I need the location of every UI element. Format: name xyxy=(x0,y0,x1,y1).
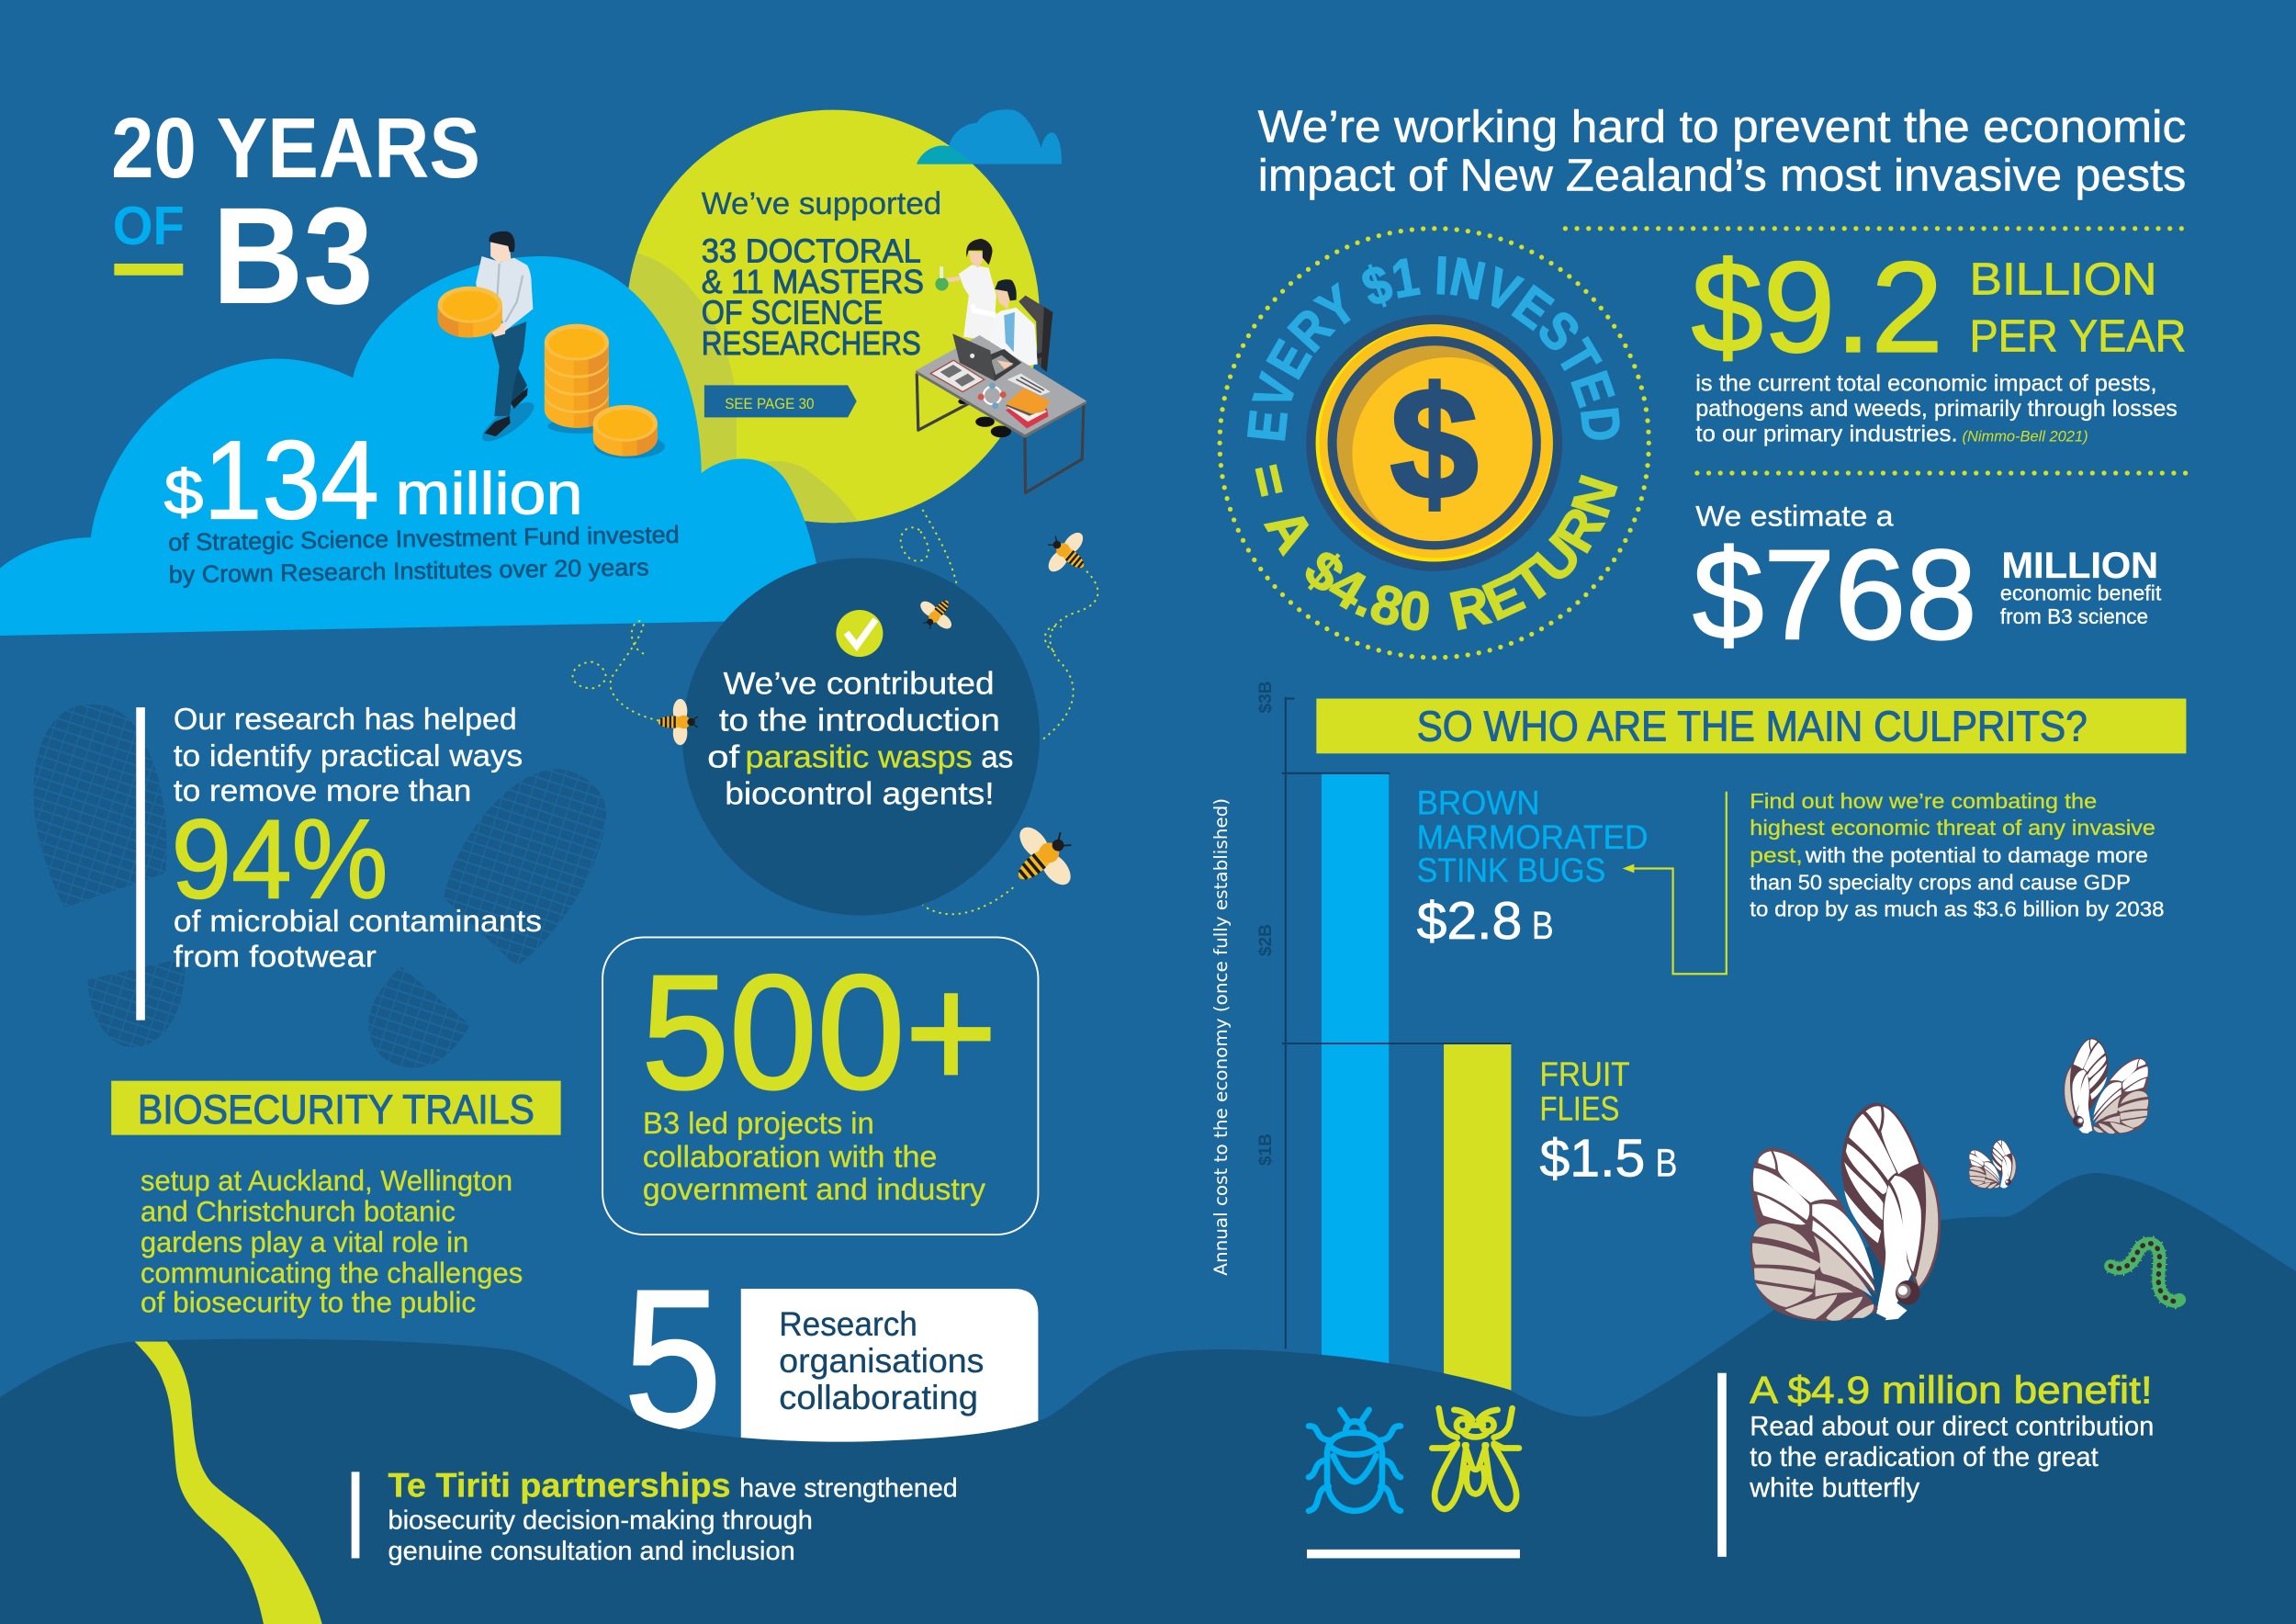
stat: $768 million: We estimate a xyxy=(1695,500,1894,532)
badge: every $1 invested xyxy=(1218,226,1651,660)
researchers text: RESEARCHERS xyxy=(702,325,921,362)
stat: $768 million: $768 xyxy=(1693,524,1976,666)
icon: fruit fly xyxy=(1432,1408,1519,1509)
fruit flies label: FLIES xyxy=(1539,1090,1619,1128)
stat: $768 million: from B3 science xyxy=(2000,604,2148,628)
Te Tiriti partnerships xyxy=(352,1466,958,1566)
footwear stat: to remove more than xyxy=(174,774,471,808)
dark circle panel: parasitic wasps xyxy=(682,558,1040,915)
dotted divider xyxy=(1565,229,2186,473)
research organisations text: organisations xyxy=(779,1341,984,1380)
icon: stink bug xyxy=(1309,1410,1401,1511)
badge: every $1 invested: = A $4.80 RETURN xyxy=(1255,464,1618,630)
footwear stat: 94% xyxy=(172,796,388,922)
stat: $768 million: MILLION xyxy=(2002,546,2158,586)
stink bugs label: BROWN xyxy=(1417,784,1539,821)
stat: $768 million: economic benefit xyxy=(2000,581,2162,605)
footwear stat: of microbial contaminants xyxy=(174,905,542,939)
right heading xyxy=(1258,102,2186,200)
badge: every $1 invested: $ xyxy=(1390,355,1479,532)
stat: $9.2 billion: (Nimmo-Bell 2021) xyxy=(1962,428,2088,445)
footwear stat: from footwear xyxy=(174,940,377,974)
researchers text xyxy=(702,186,941,362)
biosecurity trails text: setup at Auckland, Wellington xyxy=(141,1165,512,1197)
see page tag xyxy=(704,385,857,417)
right heading: We’re working hard to prevent the economic xyxy=(1258,102,2186,152)
base line under icons xyxy=(1307,1550,1520,1558)
small butterfly upper xyxy=(2064,1038,2149,1133)
funding figure: 134 xyxy=(204,417,379,542)
biosecurity trails text: gardens play a vital role in xyxy=(141,1226,468,1258)
stink bug text: highest economic threat of any invasive xyxy=(1750,816,2155,840)
research organisations text: collaborating xyxy=(779,1378,978,1416)
stink bug text: Find out how we’re combating the xyxy=(1750,789,2097,813)
fruit flies label: FRUIT xyxy=(1539,1055,1630,1093)
biosecurity trails text: of biosecurity to the public xyxy=(141,1287,476,1319)
funding figure xyxy=(164,417,680,589)
butterfly benefit text: A $4.9 million benefit! xyxy=(1750,1368,2153,1411)
butterfly benefit text xyxy=(1717,1368,2154,1557)
stat: $9.2 billion: BILLION xyxy=(1969,254,2157,304)
stat: $9.2 billion: is the current total economic impact of pests, xyxy=(1695,372,2157,397)
stat: $9.2 billion: to our primary industries. xyxy=(1695,423,1958,447)
wasps text xyxy=(707,667,1013,811)
researchers text: 33 DOCTORAL xyxy=(702,232,921,269)
icon: coin stack xyxy=(545,324,665,458)
biosecurity trails text: communicating the challenges xyxy=(141,1257,523,1290)
lime circle panel: researchers xyxy=(623,110,1040,527)
Te Tiriti partnerships: biosecurity decision-making through xyxy=(388,1506,813,1536)
dark wave ground xyxy=(0,1173,2296,1624)
badge: every $1 invested: EVERY $1 INVESTED xyxy=(1247,255,1620,441)
wasps text: to the introduction xyxy=(719,704,1000,739)
stink bug text: than 50 specialty crops and cause GDP xyxy=(1750,871,2131,895)
bee flight trails xyxy=(573,510,1097,914)
panel: 500+ projects: 500+ xyxy=(641,942,997,1123)
stink bug text: pest, xyxy=(1750,843,1803,867)
wasps text: biocontrol agents! xyxy=(725,776,995,811)
stat: $9.2 billion: pathogens and weeds, primarily through losses xyxy=(1695,397,2178,422)
fruit flies label xyxy=(1539,1055,1677,1188)
arrow xyxy=(1623,792,1727,974)
small butterfly lower xyxy=(1969,1140,2016,1189)
panel: 500+ projects xyxy=(602,937,1038,1235)
title: OF xyxy=(113,196,185,256)
title xyxy=(111,100,480,333)
stink bug text xyxy=(1750,789,2165,920)
researchers text: We’ve supported xyxy=(702,186,941,221)
stink bug text: to drop by as much as $3.6 billion by 2038 xyxy=(1750,897,2165,920)
fruit flies label: B xyxy=(1655,1141,1677,1185)
heading: biosecurity trails: BIOSECURITY TRAILS xyxy=(138,1088,535,1133)
funding figure: $ xyxy=(164,457,204,528)
panel: 5 research organisations: 5 xyxy=(624,1250,722,1469)
funding figure: of Strategic Science Investment Fund invested xyxy=(168,521,680,556)
title: B3 xyxy=(212,178,374,333)
Te Tiriti partnerships: genuine consultation and inclusion xyxy=(388,1537,795,1566)
cyan cloud panel xyxy=(0,256,826,636)
researchers text: OF SCIENCE xyxy=(702,294,883,331)
stat: $9.2 billion: PER YEAR xyxy=(1969,311,2186,362)
stink bugs label: $2.8 xyxy=(1417,892,1522,951)
icon: check mark xyxy=(836,610,883,657)
biosecurity trails text: and Christchurch botanic xyxy=(141,1196,456,1228)
title: 20 YEARS xyxy=(111,100,480,196)
stink bugs label: STINK BUGS xyxy=(1417,851,1605,889)
chart axis xyxy=(1210,681,1511,1348)
panel: 500+ projects: government and industry xyxy=(643,1173,985,1207)
wasps text: parasitic wasps xyxy=(746,739,973,774)
funding figure: million xyxy=(395,460,583,527)
illustration: butterflies and caterpillar xyxy=(1750,1038,2179,1321)
see page tag: SEE PAGE 30 xyxy=(725,395,814,412)
panel: 500+ projects: B3 led projects in xyxy=(643,1107,874,1141)
footwear stat xyxy=(136,703,542,1021)
stat: $9.2 billion: $9.2 xyxy=(1692,235,1943,379)
stink bugs label: B xyxy=(1532,904,1554,948)
large white butterfly xyxy=(1750,1103,1940,1321)
wasps text: as xyxy=(981,739,1013,774)
stink bugs label xyxy=(1417,784,1648,951)
chart axis: Annual cost to the economy (once fully established) xyxy=(1210,798,1232,1276)
panel: 5 research organisations xyxy=(624,1250,1038,1469)
chart axis: $3B xyxy=(1256,681,1276,713)
biosecurity trails text xyxy=(141,1165,523,1319)
funding figure: by Crown Research Institutes over 20 years xyxy=(169,553,649,589)
wasps text: We’ve contributed xyxy=(724,667,995,702)
bar chart bars xyxy=(1322,773,1511,1425)
icon: person carrying coins xyxy=(438,231,539,448)
caterpillar xyxy=(2110,1244,2179,1302)
bee icons xyxy=(658,522,1098,905)
research organisations text: Research xyxy=(779,1304,917,1343)
chart axis: $2B xyxy=(1256,924,1276,956)
illustration: scientists at desk xyxy=(916,239,1086,493)
footwear stat: Our research has helped xyxy=(174,703,517,737)
panel: 500+ projects: collaboration with the xyxy=(643,1141,937,1175)
fruit flies label: $1.5 xyxy=(1539,1129,1645,1188)
footwear stat: to identify practical ways xyxy=(174,739,523,773)
heading: main culprits: SO WHO ARE THE MAIN CULPRITS? xyxy=(1417,703,2088,750)
footprints xyxy=(34,705,606,1067)
chart axis: $1B xyxy=(1256,1133,1276,1166)
stink bugs label: MARMORATED xyxy=(1417,818,1648,856)
research organisations text xyxy=(779,1304,984,1416)
butterfly benefit text: to the eradication of the great xyxy=(1750,1443,2099,1472)
stat: $768 million xyxy=(1693,500,2162,666)
butterfly benefit text: white butterfly xyxy=(1749,1473,1920,1503)
Te Tiriti partnerships: have strengthened xyxy=(739,1473,958,1503)
stink bug text: with the potential to damage more xyxy=(1805,843,2148,867)
Te Tiriti partnerships: Te Tiriti partnerships xyxy=(388,1466,731,1504)
right heading: impact of New Zealand’s most invasive pests xyxy=(1258,150,2186,200)
lime trail xyxy=(135,1341,322,1624)
small cloud xyxy=(917,109,1062,164)
stat: $9.2 billion xyxy=(1692,235,2186,447)
wasps text: of xyxy=(707,739,740,774)
butterfly benefit text: Read about our direct contribution xyxy=(1750,1412,2154,1441)
researchers text: & 11 MASTERS xyxy=(702,264,924,300)
